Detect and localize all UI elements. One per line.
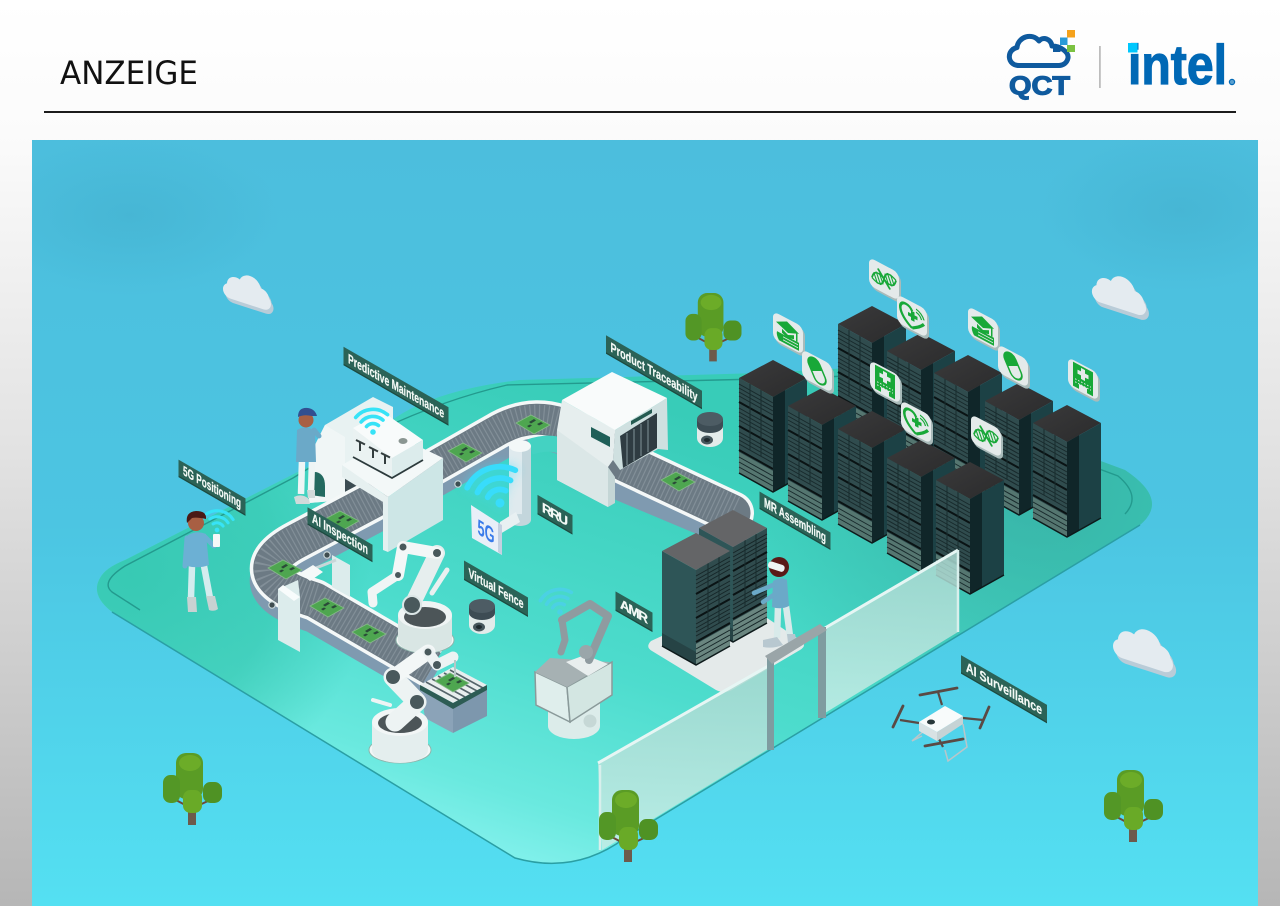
machine: product traceability scanner <box>557 372 668 507</box>
conveyor rollers <box>269 481 461 608</box>
icon: hospital 2 <box>1068 357 1100 404</box>
label: AI Inspection <box>308 507 372 562</box>
conveyor belt: upper <box>400 419 735 525</box>
label: RRU: RRU <box>542 500 568 530</box>
label: Predictive Maintenance <box>344 347 448 426</box>
logo divider <box>1099 46 1101 88</box>
label: AMR: AMR <box>620 597 648 628</box>
cloud: lower right <box>1113 619 1176 680</box>
icon: dna 2 <box>971 414 1003 461</box>
label: AI Inspection: AI Inspection <box>312 511 368 558</box>
tree: front right <box>1104 770 1163 842</box>
label: AI Surveillance <box>961 655 1047 723</box>
person: 5G positioning <box>185 511 220 612</box>
label: 5G Positioning <box>178 460 246 516</box>
header: ANZEIGE: ANZEIGE <box>60 54 198 92</box>
logo: QCT <box>1009 30 1075 100</box>
label: RRU <box>538 495 572 535</box>
icon: graduation cap 2 <box>968 306 1000 353</box>
label: Product Traceability: Product Traceability <box>610 340 698 406</box>
label: MR Assembling <box>760 492 830 550</box>
inspection tray <box>420 667 487 733</box>
cloud: top left <box>223 267 274 316</box>
camera: product traceability <box>697 412 723 447</box>
icon: dna <box>869 257 901 304</box>
server rack array <box>739 306 1101 594</box>
conveyor belt: lower <box>271 497 432 680</box>
header rule <box>44 111 1236 113</box>
label: AMR <box>616 591 652 632</box>
icon: graduation cap <box>773 311 805 358</box>
label: Predictive Maintenance: Predictive Maintenance <box>348 352 444 422</box>
platform <box>97 368 1152 863</box>
rru mast <box>500 440 531 534</box>
icon: hospital <box>870 360 902 407</box>
icon: pill <box>802 349 834 396</box>
tree: at fence <box>599 790 658 862</box>
label: 5G Positioning: 5G Positioning <box>183 464 241 512</box>
tree: back centre <box>685 293 742 361</box>
wifi: amr <box>539 586 576 619</box>
label: MR Assembling: MR Assembling <box>764 495 826 546</box>
label: Virtual Fence <box>464 561 528 617</box>
glass fence <box>598 550 958 850</box>
logo: intel: intel <box>1128 33 1227 96</box>
icon: heart care 2 <box>901 400 933 447</box>
tree: front left <box>163 753 222 825</box>
server racks: mr station <box>662 510 767 665</box>
drone <box>893 688 989 761</box>
robot arm: upper <box>372 544 454 653</box>
person: engineer <box>294 408 319 504</box>
machine: predictive maintenance tunnel <box>342 412 443 552</box>
label: Virtual Fence: Virtual Fence <box>468 566 524 613</box>
mr floor pad <box>648 600 804 692</box>
label: Product Traceability <box>606 335 702 409</box>
machine: tunnel back section <box>309 397 393 530</box>
cloud: top right <box>1092 267 1149 322</box>
icon: 5G tile <box>471 505 502 555</box>
person: mr operator <box>754 557 797 648</box>
icon: pill 2 <box>998 344 1030 391</box>
wifi: 5G positioning <box>203 508 234 535</box>
wifi: predictive maintenance <box>355 408 389 436</box>
circuit boards <box>268 415 695 643</box>
robot arm: lower <box>369 648 455 763</box>
amr robot <box>535 604 612 739</box>
icon: heart care <box>897 294 929 341</box>
label: AI Surveillance: AI Surveillance <box>966 660 1042 719</box>
logo: QCT: QCT <box>1009 70 1070 100</box>
conveyor gate <box>278 555 350 652</box>
wifi: 5G signal <box>464 460 526 516</box>
icon: 5G tile: 5G <box>478 514 494 550</box>
camera: virtual fence <box>469 599 495 634</box>
